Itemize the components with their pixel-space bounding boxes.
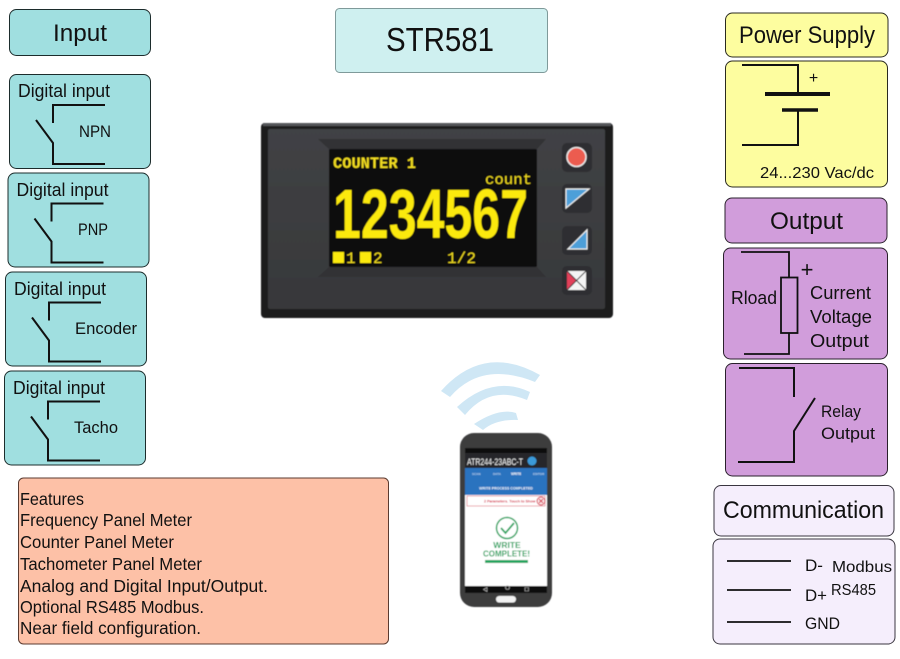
panel: communication [713, 539, 895, 644]
phone: WRITE PROCESS COMPLETED [479, 486, 533, 490]
panel: communication: D+ [805, 586, 827, 605]
display screen: count [485, 172, 532, 189]
icon: bus wires [727, 561, 791, 622]
icon: relay contact [738, 368, 815, 462]
power supply heading [726, 13, 888, 57]
phone tabs: SCAN [472, 472, 481, 476]
panel: digital input Encoder: Digital input [14, 279, 106, 299]
panel: relay output: Output [821, 424, 875, 443]
panel: digital input NPN [10, 74, 150, 168]
panel: digital input Tacho: Digital input [13, 378, 105, 398]
panel: features: Counter Panel Meter [20, 532, 174, 552]
panel: features [18, 478, 388, 644]
panel: features: Analog and Digital Input/Output. [20, 576, 268, 596]
panel: digital input PNP: Digital input [16, 180, 108, 200]
panel: power supply: + [809, 70, 818, 87]
panel: features: Tachometer Panel Meter [20, 554, 202, 574]
phone tabs: EDITOR [533, 472, 545, 476]
panel: digital input Tacho [4, 371, 146, 465]
panel: communication: Modbus [832, 559, 892, 576]
phone tabs: WRITE [511, 472, 521, 476]
power supply heading: Power Supply [739, 22, 875, 49]
panel: relay output: Relay [821, 402, 861, 421]
panel: communication: GND [805, 614, 840, 633]
input heading: Input [53, 20, 107, 47]
communication heading: Communication [723, 497, 884, 524]
panel: current voltage output: Current [810, 283, 871, 303]
icon: wifi waves [441, 362, 540, 430]
panel: digital input Tacho: Tacho [74, 418, 118, 437]
phone header text: ATR244-23ABC-T [467, 457, 523, 467]
panel: communication: D- [805, 556, 823, 575]
display screen: COUNTER 1 [333, 155, 416, 173]
icon: load resistor [741, 252, 798, 354]
phone write complete message: COMPLETE! [483, 548, 530, 558]
output heading [725, 198, 887, 243]
panel: communication: RS485 [831, 582, 876, 599]
panel: relay output [726, 364, 888, 476]
button: blue triangle down [562, 184, 592, 213]
phone warning strip: 2 Parameters. Touch to Show [484, 500, 535, 504]
panel: power supply [726, 61, 888, 187]
panel: features: Near field configuration. [20, 618, 201, 638]
icon: battery symbol [742, 65, 830, 145]
title: STR581 [386, 21, 494, 58]
button: red circle [562, 143, 592, 172]
display screen: 1234567 [333, 175, 528, 253]
panel: features: Features [20, 489, 84, 509]
phone warning strip [467, 496, 545, 506]
panel: digital input Encoder: Encoder [75, 319, 137, 338]
device: panel meter [261, 123, 613, 318]
phone write complete message: WRITE [493, 540, 521, 550]
display screen: 1/2 [447, 250, 476, 268]
panel: features: Frequency Panel Meter [20, 510, 192, 530]
panel: current voltage output [724, 248, 888, 359]
display screen: 1 [346, 250, 356, 268]
panel: features: Optional RS485 Modbus. [20, 597, 204, 617]
panel: digital input Encoder [6, 272, 146, 366]
button: cross [562, 266, 592, 295]
panel: current voltage output: Rload [731, 288, 777, 308]
button: blue triangle up [562, 226, 592, 255]
panel: digital input NPN: Digital input [18, 81, 110, 101]
panel: current voltage output: + [801, 257, 813, 282]
communication heading [714, 486, 894, 536]
phone nav icons [484, 586, 528, 592]
title [336, 8, 548, 72]
output heading: Output [770, 208, 843, 235]
input heading [10, 10, 150, 56]
panel: current voltage output: Output [810, 331, 869, 351]
phone [460, 433, 552, 607]
panel: digital input NPN: NPN [79, 122, 111, 141]
panel: power supply: 24...230 Vac/dc [760, 165, 874, 182]
panel: digital input PNP [8, 173, 149, 267]
phone tabs [472, 472, 545, 476]
phone tabs: DATA [493, 472, 502, 476]
panel: current voltage output: Voltage [810, 307, 872, 327]
display screen [329, 149, 537, 268]
panel: digital input PNP: PNP [78, 220, 108, 239]
phone write complete message [483, 518, 530, 563]
display screen: 2 [373, 250, 383, 268]
